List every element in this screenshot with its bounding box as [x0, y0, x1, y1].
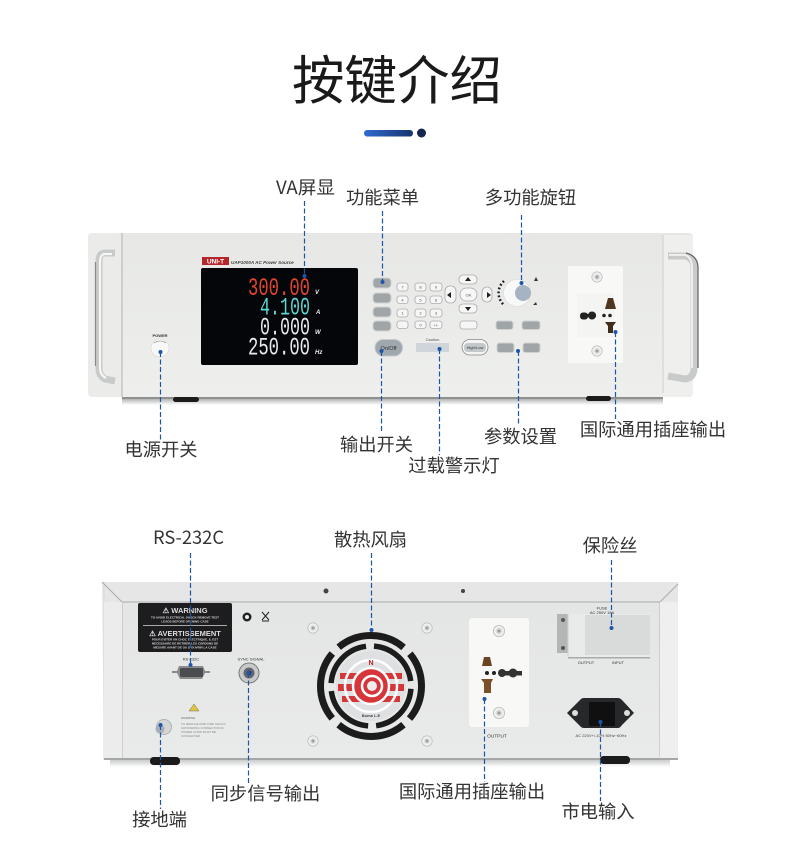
label: sync signal output: [211, 671, 320, 806]
power inlet: AC 220V+/-10% 50Hz~60Hz: [576, 733, 626, 738]
label: cooling fan: [334, 526, 407, 632]
panel: rear view device: [102, 582, 678, 767]
warning label: MESURE AVANT DE OU D OUVRIR LA CASE: [153, 646, 217, 650]
grounding terminal: [156, 704, 226, 738]
VA display: 300.00: [248, 274, 310, 303]
front chassis: [88, 233, 693, 405]
RS-232C port: [172, 656, 210, 679]
numeric keypad: 1: [401, 310, 404, 316]
sync signal BNC port: [238, 656, 265, 683]
label: output switch: 输出开关: [340, 431, 413, 457]
arrow pad: [445, 275, 492, 313]
on/off key: On/Off: [380, 346, 397, 352]
front callouts: [124, 174, 726, 478]
fuse box: FUSE: [597, 606, 608, 610]
VA display: [201, 268, 358, 365]
warning label: TO AVOID ELECTRICAL SHOCK REMOVE TEST: [151, 616, 219, 620]
label: sync signal output: 同步信号输出: [211, 780, 320, 806]
title underline accent: [364, 128, 426, 138]
label: parameter settings: 参数设置: [484, 423, 557, 449]
arrow pad: OK: [466, 292, 472, 298]
lower function keys: [460, 321, 540, 355]
panel: front view device: [88, 233, 698, 405]
rear callouts: [132, 524, 637, 832]
sync signal BNC port: SYNC SIGNAL: [238, 656, 265, 662]
grounding terminal: TO REDUCE RISK FIRE SHOCK: [181, 722, 226, 726]
brand: UAP1000A AC Power Source: [231, 260, 294, 265]
numeric keypad: 3: [435, 310, 438, 316]
numeric keypad: 6: [435, 298, 438, 302]
warning label: [138, 603, 232, 652]
power inlet: [567, 698, 634, 738]
VA display: 4.100: [260, 294, 310, 322]
universal socket rear: [469, 618, 529, 740]
numeric keypad: .: [402, 322, 403, 328]
VA display: W: [315, 330, 322, 336]
function menu keys: [373, 278, 391, 331]
label: VA display: VA屏显: [276, 174, 335, 200]
cooling fan: Boma L.E: [362, 713, 381, 718]
label: power switch: [124, 350, 198, 462]
warning label: NECESSAIRE DE RETIRER LES CORDONS DE: [152, 642, 218, 646]
numeric keypad: 2: [419, 310, 422, 316]
cooling fan: [300, 615, 442, 757]
power button: [151, 333, 169, 357]
label: universal socket output: 国际通用插座输出: [580, 416, 726, 442]
label: fuse: [583, 532, 637, 630]
label: RS-232C: RS-232C: [153, 524, 224, 550]
brand: [202, 257, 294, 266]
grounding terminal: GROUNDING CONNECTOR IN: [181, 726, 224, 730]
numeric keypad: [397, 283, 442, 328]
left handle: [88, 233, 122, 397]
VA display: 250.00: [248, 334, 310, 362]
warning label: ⚠ AVERTISSEMENT: [149, 629, 221, 638]
label: multifunction knob: 多功能旋钮: [485, 184, 576, 210]
on/off key: [375, 340, 402, 356]
fuse box: [557, 606, 650, 665]
power button: POWER: [152, 333, 168, 338]
VA display: Hz: [315, 350, 322, 356]
label: power switch: 电源开关: [124, 436, 198, 462]
label: function menu: [346, 184, 419, 284]
title: 按键介绍: [292, 39, 502, 115]
multifunction knob: [499, 277, 538, 306]
universal socket rear: OUTPUT: [487, 734, 507, 740]
warning label: ⚠ WARNING: [162, 606, 208, 615]
label: parameter settings: [484, 349, 557, 449]
overload caution lamp: Caution: [426, 337, 439, 342]
label: overload lamp: 过载警示灯: [408, 452, 500, 478]
label: ground terminal: 接地端: [132, 806, 187, 832]
label: multifunction knob: [485, 184, 576, 285]
grounding terminal: WARNING: [181, 716, 196, 720]
fuse box: OUTPUT: [578, 660, 595, 665]
numeric keypad: 7: [401, 284, 404, 290]
VA display: V: [315, 290, 320, 296]
label: universal socket output rear: [399, 697, 545, 804]
label: mains input: 市电输入: [561, 798, 635, 824]
fuse box: INPUT: [612, 660, 625, 665]
numeric keypad: +/-: [434, 322, 439, 328]
rear chassis: [102, 582, 678, 767]
grounding terminal: CONNECTED: [181, 734, 201, 738]
label: fuse: 保险丝: [583, 532, 637, 558]
screws: [308, 622, 432, 746]
numeric keypad: 5: [419, 298, 422, 302]
lower function keys: High/Low: [467, 345, 483, 350]
label: universal socket output rear: 国际通用插座输出: [399, 778, 545, 804]
feet: [173, 396, 611, 402]
warning label: LEADS BEFORE OPENING CASE: [161, 620, 209, 624]
label: VA display: [276, 174, 335, 278]
symbols: [242, 588, 465, 622]
overload caution lamp: [416, 337, 449, 352]
numeric keypad: 8: [419, 284, 422, 290]
feet: [150, 756, 630, 765]
label: RS-232C: [153, 524, 224, 667]
VA display: A: [315, 310, 320, 316]
brand: UNI-T: [207, 258, 224, 266]
label: cooling fan: 散热风扇: [334, 526, 407, 552]
numeric keypad: 9: [435, 284, 438, 290]
warning label: POUR EVITER UN CHOC ELECTRIQUE, IL EST: [152, 638, 218, 642]
label: function menu: 功能菜单: [346, 184, 419, 210]
right handle: [663, 235, 698, 395]
numeric keypad: 0: [419, 322, 422, 328]
grounding terminal: POWER CORD MUST BE: [181, 730, 216, 734]
label: output switch: [340, 349, 413, 457]
VA display: 0.000: [260, 314, 310, 342]
label: ground terminal: [132, 723, 187, 832]
label: mains input: [561, 720, 635, 824]
label: overload lamp: [408, 347, 500, 478]
fuse box: AC 250V 15A: [590, 610, 614, 615]
RS-232C port: RS-232C: [183, 656, 199, 662]
cooling fan: N: [368, 660, 374, 667]
universal socket front: [568, 266, 623, 363]
label: universal socket output: [580, 330, 726, 442]
numeric keypad: 4: [401, 298, 404, 302]
